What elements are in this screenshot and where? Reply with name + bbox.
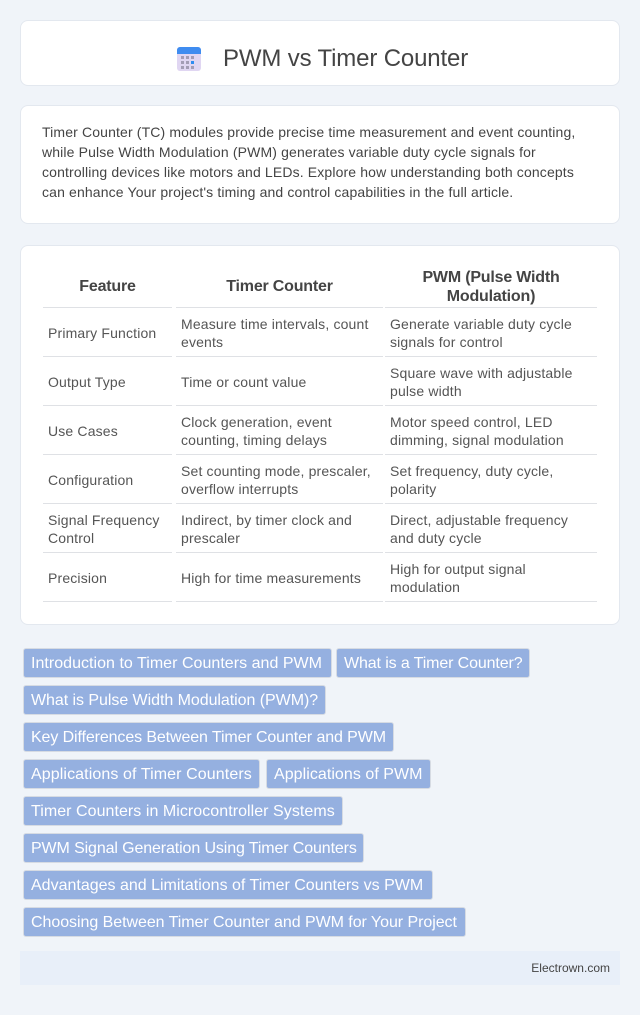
table headers <box>79 269 560 305</box>
row: precision: modulation <box>390 579 460 595</box>
tag: Timer Counters in Microcontroller Systems <box>31 803 335 820</box>
intro text: can enhance Your project's timing and control capabilities in the full article. <box>42 184 513 200</box>
icon: calendar <box>177 47 201 71</box>
row: output type: Time or count value <box>181 374 306 390</box>
tag: What is Pulse Width Modulation (PWM)? <box>31 692 318 709</box>
tag: Advantages and Limitations of Timer Counters vs PWM <box>31 877 423 894</box>
intro text: Timer Counter (TC) modules provide precise time measurement and event counting, <box>42 124 575 140</box>
table headers: Modulation) <box>447 288 535 305</box>
tag <box>23 907 466 937</box>
row: use cases: counting, timing delays <box>181 432 327 448</box>
tag <box>266 759 431 789</box>
intro card <box>20 105 620 224</box>
row: primary function: Measure time intervals, count <box>181 316 368 332</box>
row: use cases: Clock generation, event <box>181 414 332 430</box>
header card <box>20 20 620 86</box>
row: signal frequency control: Signal Frequency <box>48 512 160 528</box>
row: configuration: Configuration <box>48 472 133 488</box>
row: output type: Output Type <box>48 374 126 390</box>
row: primary function: Primary Function <box>48 325 156 341</box>
tag <box>23 796 343 826</box>
row: signal frequency control: Direct, adjustable frequency <box>390 512 568 528</box>
tag <box>23 648 332 678</box>
row: primary function: Generate variable duty cycle <box>390 316 572 332</box>
row: precision: Precision <box>48 570 107 586</box>
row: precision: High for output signal <box>390 561 526 577</box>
row: precision: High for time measurements <box>181 570 361 586</box>
row: use cases: Use Cases <box>48 423 118 439</box>
table headers: Feature <box>79 278 136 295</box>
row: signal frequency control: Control <box>48 530 94 546</box>
row: signal frequency control: Indirect, by timer clock and <box>181 512 352 528</box>
tag <box>336 648 530 678</box>
row: use cases: dimming, signal modulation <box>390 432 564 448</box>
tag <box>23 685 326 715</box>
row: signal frequency control <box>48 512 568 546</box>
tag list <box>23 648 530 937</box>
row: primary function <box>48 316 572 350</box>
footer credit: Electrown.com <box>531 961 610 975</box>
row: primary function: events <box>181 334 223 350</box>
tag: Introduction to Timer Counters and PWM <box>31 655 322 672</box>
title: PWM vs Timer Counter <box>223 45 468 72</box>
row: signal frequency control: prescaler <box>181 530 240 546</box>
row: configuration <box>48 463 553 497</box>
intro text: while Pulse Width Modulation (PWM) generates variable duty cycle signals for <box>42 144 536 160</box>
table headers: Timer Counter <box>226 278 333 295</box>
row: use cases: Motor speed control, LED <box>390 414 553 430</box>
tag <box>23 722 394 752</box>
tag: Applications of Timer Counters <box>31 766 252 783</box>
panel: comparison table <box>20 245 620 625</box>
tag <box>23 870 433 900</box>
row: output type <box>48 365 573 399</box>
row: use cases <box>48 414 564 448</box>
row: output type: pulse width <box>390 383 462 399</box>
row: configuration: polarity <box>390 481 436 497</box>
tag: What is a Timer Counter? <box>344 655 523 672</box>
footer <box>20 951 620 985</box>
row: configuration: Set counting mode, prescaler, <box>181 463 371 479</box>
intro text <box>42 124 575 200</box>
table headers: PWM (Pulse Width <box>422 269 560 286</box>
tag: PWM Signal Generation Using Timer Counters <box>31 840 357 857</box>
tag: Applications of PWM <box>274 766 423 783</box>
row: configuration: overflow interrupts <box>181 481 298 497</box>
row: output type: Square wave with adjustable <box>390 365 573 381</box>
tag <box>23 759 260 789</box>
tag: Key Differences Between Timer Counter and PWM <box>31 729 386 746</box>
tag <box>23 833 364 863</box>
intro text: controlling devices like motors and LEDs. Explore how understanding both concepts <box>42 164 574 180</box>
row: precision <box>48 561 526 595</box>
row: signal frequency control: and duty cycle <box>390 530 482 546</box>
row: configuration: Set frequency, duty cycle, <box>390 463 553 479</box>
tag: Choosing Between Timer Counter and PWM for Your Project <box>31 914 457 931</box>
row: primary function: signals for control <box>390 334 503 350</box>
